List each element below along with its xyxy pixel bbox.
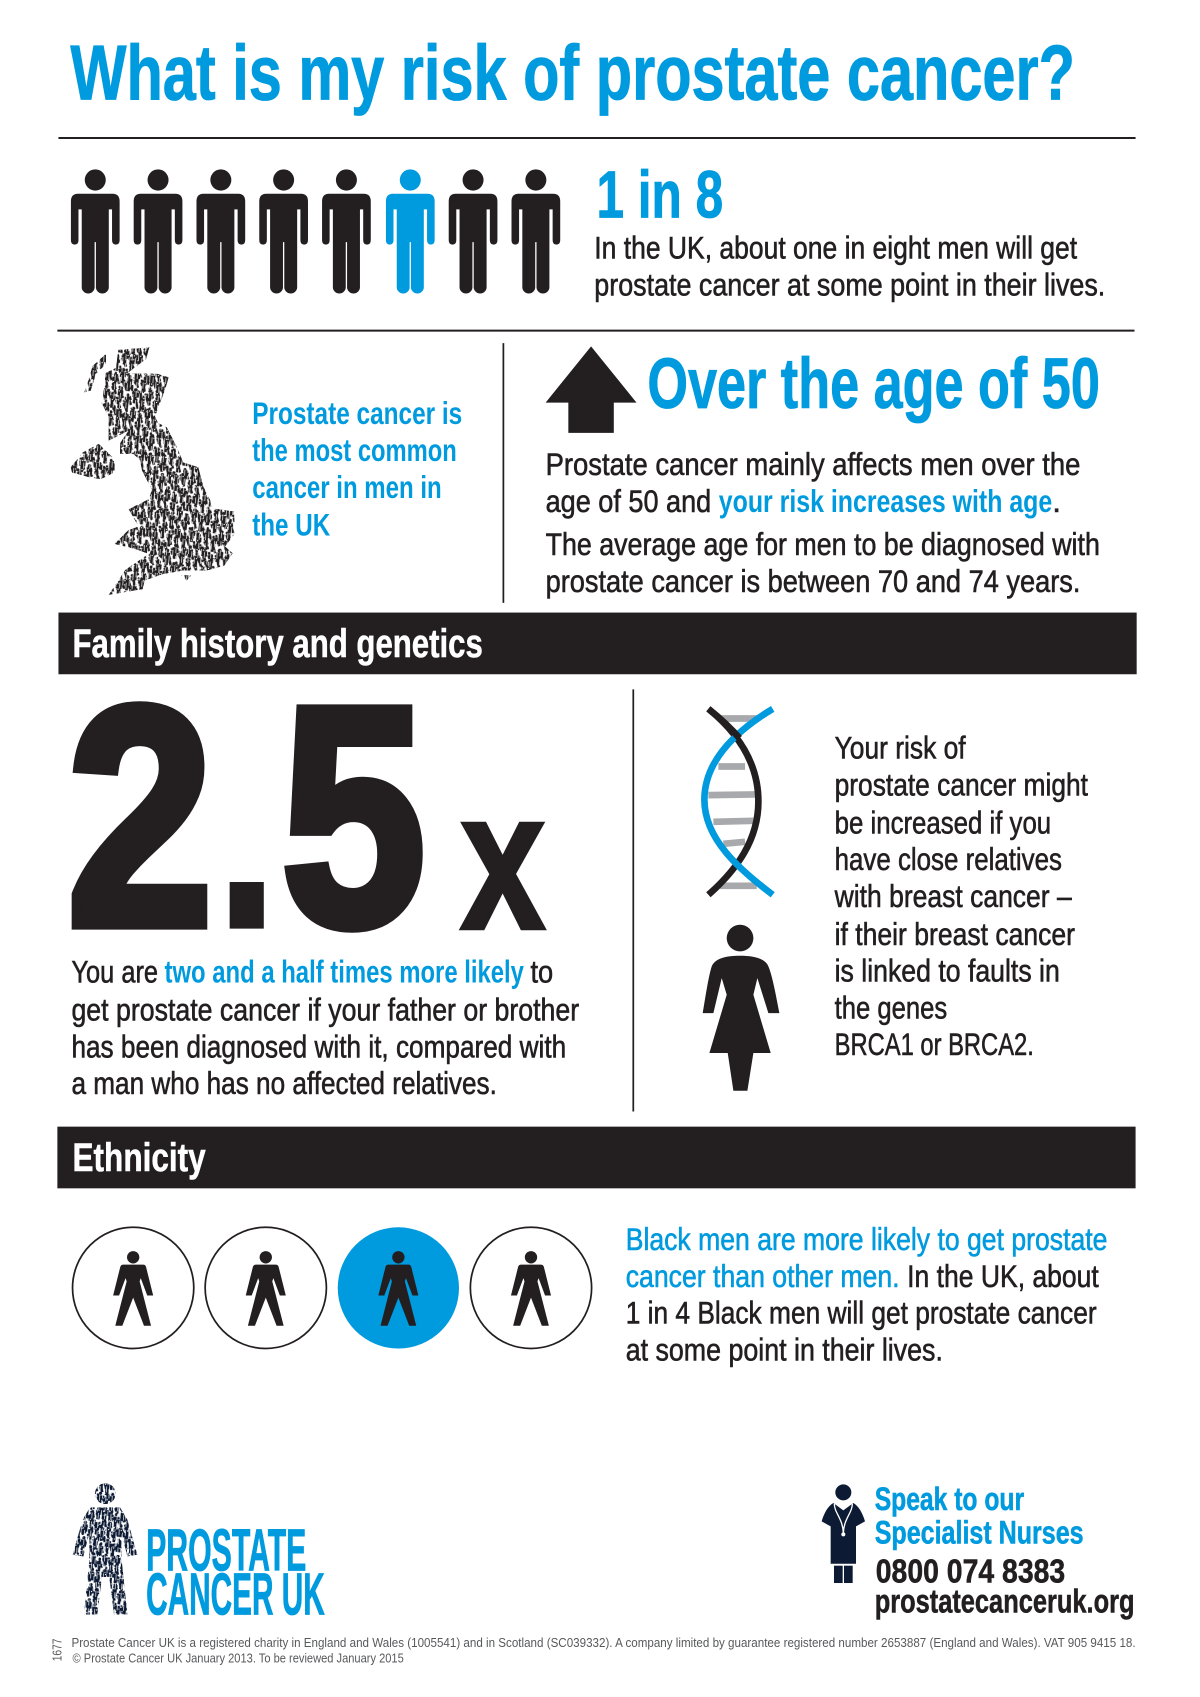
contact details bbox=[875, 1481, 1135, 1621]
text block: age risk: age of 50 and bbox=[546, 484, 711, 519]
heading bar: family history and genetics: Family history and genetics bbox=[73, 622, 483, 666]
text block: ethnicity bbox=[626, 1222, 1107, 1367]
contact details: 0800 074 8383 bbox=[876, 1553, 1065, 1590]
heading bar: ethnicity: Ethnicity bbox=[73, 1136, 206, 1180]
text block: age risk: The average age for men to be diagnosed with bbox=[546, 527, 1100, 562]
text block: family history: has been diagnosed with it, compared with bbox=[71, 1029, 566, 1064]
callout: most common cancer: the most common bbox=[252, 433, 457, 468]
text block: family history: to bbox=[530, 955, 553, 990]
contact details: Specialist Nurses bbox=[875, 1514, 1084, 1550]
panel: 1 in 8 text: In the UK, about one in eight men will get bbox=[594, 231, 1077, 266]
big number: 2.5 x: . bbox=[220, 694, 274, 978]
text block: family history bbox=[71, 955, 579, 1101]
text block: breast cancer genes: prostate cancer might bbox=[835, 767, 1088, 802]
footer: legal text: 1677 bbox=[51, 1639, 65, 1661]
footer: legal text: Prostate Cancer UK is a registered charity in England and Wales (1005541) and in Scotland (SC039332). A company limited by guarantee registered number 2653887 (England and Wales). VAT 905 9415 18. bbox=[71, 1636, 1136, 1650]
callout: most common cancer: Prostate cancer is bbox=[252, 396, 462, 431]
text block: breast cancer genes: if their breast cancer bbox=[835, 917, 1075, 952]
text block: breast cancer genes: the genes bbox=[835, 990, 947, 1025]
text block: breast cancer genes: BRCA1 or BRCA2. bbox=[835, 1027, 1034, 1062]
text block: age risk bbox=[546, 447, 1100, 599]
text block: age risk: . bbox=[1052, 484, 1061, 519]
callout: most common cancer: cancer in men in bbox=[252, 470, 442, 505]
text block: breast cancer genes: with breast cancer – bbox=[834, 879, 1072, 914]
icon: woman bbox=[703, 925, 779, 1091]
text block: breast cancer genes: Your risk of bbox=[835, 731, 966, 766]
logo: wordmark bbox=[146, 1516, 325, 1628]
footer: legal text bbox=[51, 1636, 1136, 1665]
text block: breast cancer genes: is linked to faults in bbox=[835, 954, 1060, 989]
panel: 1 in 8 text: prostate cancer at some point in their lives. bbox=[594, 267, 1105, 302]
text block: age risk: prostate cancer is between 70 and 74 years. bbox=[546, 564, 1080, 599]
text block: ethnicity: 1 in 4 Black men will get prostate cancer bbox=[626, 1296, 1097, 1331]
pictogram: four people in circles bbox=[73, 1227, 592, 1349]
panel: 1 in 8 text: 1 in 8 bbox=[596, 158, 723, 233]
logo: wordmark: PROSTATE bbox=[146, 1516, 306, 1583]
panel: 1 in 8 pictogram bbox=[71, 169, 560, 294]
logo: figure made of people bbox=[70, 1481, 140, 1616]
text block: family history: two and a half times more likely bbox=[165, 955, 524, 990]
icon: up arrow bbox=[546, 346, 637, 433]
text block: age risk: Prostate cancer mainly affects men over the bbox=[546, 447, 1080, 482]
text block: family history: get prostate cancer if your father or brother bbox=[71, 993, 579, 1028]
text block: breast cancer genes: have close relatives bbox=[835, 842, 1062, 877]
big number: 2.5 x: x bbox=[460, 750, 546, 972]
text block: breast cancer genes: be increased if you bbox=[835, 805, 1051, 840]
panel: 1 in 8 text bbox=[594, 158, 1105, 302]
text block: ethnicity: In the UK, about bbox=[907, 1259, 1099, 1294]
big number: 2.5 x bbox=[67, 643, 546, 991]
footer: legal text: © Prostate Cancer UK January 2013. To be reviewed January 2015 bbox=[73, 1651, 404, 1665]
heading bar: ethnicity bbox=[57, 1127, 1136, 1188]
icon: nurse bbox=[822, 1484, 865, 1583]
callout: most common cancer: the UK bbox=[252, 508, 330, 543]
icon: DNA helix bbox=[704, 709, 773, 895]
text block: age risk: your risk increases with age bbox=[719, 484, 1052, 519]
contact details: Speak to our bbox=[875, 1481, 1024, 1517]
text block: family history: a man who has no affected relatives. bbox=[71, 1066, 497, 1101]
text block: ethnicity: at some point in their lives. bbox=[626, 1332, 943, 1367]
text block: family history: You are bbox=[71, 955, 158, 990]
big number: 2.5 x: 2 bbox=[67, 643, 213, 991]
text block: breast cancer genes bbox=[834, 731, 1088, 1062]
logo: wordmark: CANCER UK bbox=[146, 1561, 325, 1628]
map of the UK made of people bbox=[70, 347, 235, 595]
callout: most common cancer bbox=[252, 396, 462, 543]
text block: ethnicity: cancer than other men. bbox=[626, 1259, 900, 1294]
text block: ethnicity: Black men are more likely to get prostate bbox=[626, 1222, 1107, 1257]
heading bar: family history and genetics bbox=[58, 613, 1137, 674]
big number: 2.5 x: 5 bbox=[281, 643, 425, 991]
